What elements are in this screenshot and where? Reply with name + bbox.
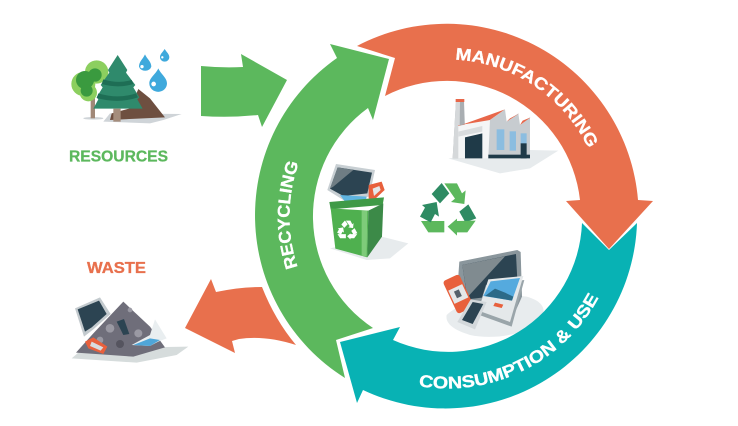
icon: recycle symbol	[420, 183, 476, 236]
heading: resources: RESOURCES	[69, 148, 168, 166]
bin recycle mark	[337, 221, 357, 239]
icon: consumer devices	[443, 250, 544, 337]
arrow: manufacturing	[357, 24, 653, 249]
label: recycling: RECYCLING	[278, 161, 298, 270]
arrow: resources into cycle	[201, 54, 287, 127]
icon: factory	[448, 99, 558, 173]
icon: resources	[71, 49, 182, 123]
icon: recycling bin with waste	[327, 164, 408, 260]
arrow: consumption and use	[340, 223, 637, 408]
arrow: recycling to waste	[185, 279, 296, 353]
icon: waste pile	[72, 297, 188, 363]
label: consumption and use: CONSUMPTION & USE	[420, 292, 599, 389]
heading: waste: WASTE	[87, 260, 146, 277]
arrow: recycling	[255, 44, 389, 378]
label: manufacturing: MANUFACTURING	[456, 48, 597, 147]
